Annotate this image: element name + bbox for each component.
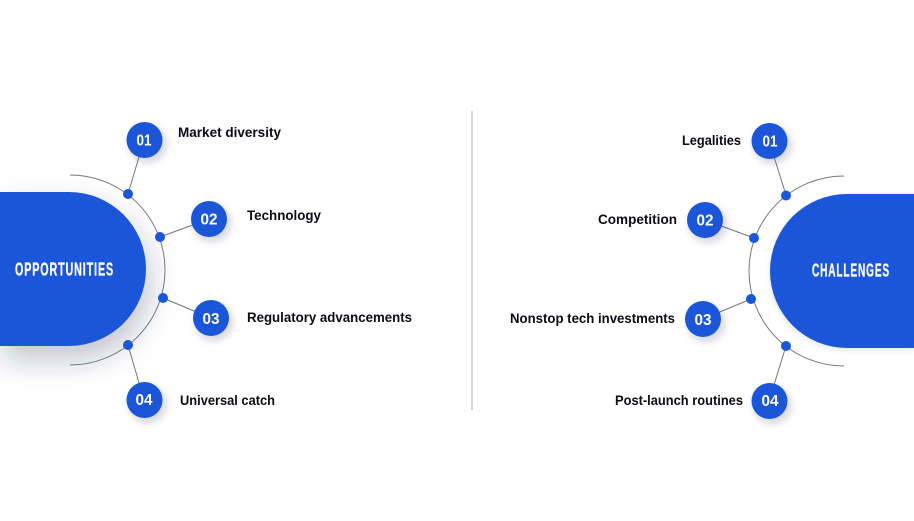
item 02: Technology <box>247 208 321 223</box>
panel: opportunities <box>0 122 412 418</box>
connector lines <box>128 140 211 400</box>
item 02: 02 <box>696 212 714 230</box>
item 01 <box>682 123 791 200</box>
item 01: 01 <box>136 132 152 150</box>
item 01: Market diversity <box>178 125 281 140</box>
item 01: 01 <box>762 134 778 150</box>
item 02: 02 <box>200 212 218 228</box>
item 04: 04 <box>762 393 779 410</box>
item 03: Nonstop tech investments <box>510 311 675 326</box>
item 04 <box>123 340 275 418</box>
item 03: 03 <box>202 311 220 328</box>
item 04: Universal catch <box>180 393 275 408</box>
center divider <box>471 111 473 410</box>
item 01: Legalities <box>682 133 741 148</box>
item 03: 03 <box>694 312 712 329</box>
heading pill: challenges <box>770 194 914 348</box>
item 04: Post-launch routines <box>615 393 743 408</box>
arc <box>70 175 165 365</box>
item 02 <box>598 202 759 243</box>
item 01 <box>123 122 281 199</box>
item 03: Regulatory advancements <box>247 310 412 325</box>
connector lines <box>703 141 786 401</box>
item 04: 04 <box>136 392 153 409</box>
item 03 <box>510 294 756 337</box>
arc <box>749 176 844 366</box>
item 02 <box>155 201 321 242</box>
panel: challenges <box>510 123 914 419</box>
heading pill: opportunities <box>0 192 146 346</box>
heading pill: opportunities: OPPORTUNITIES <box>15 260 114 280</box>
item 02: Competition <box>598 212 677 227</box>
item 04 <box>615 341 791 419</box>
item 03 <box>158 293 412 336</box>
